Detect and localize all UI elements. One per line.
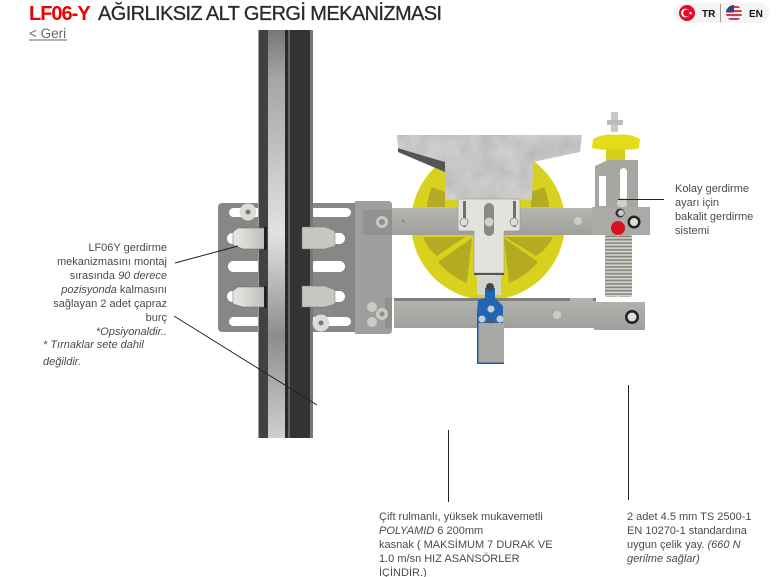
callout: tensioning system [675,183,753,237]
title: LF06-Y [29,3,91,25]
language label TR: TR [702,9,716,20]
lower cross bar [394,298,596,328]
callout: spring: 2 adet 4.5 mm TS 2500-1 [627,511,752,523]
callout: clips: değildir. [43,356,81,368]
upright bracket [595,160,638,208]
callout: clips: sağlayan 2 adet çapraz [53,298,167,310]
callout: spring: EN 10270-1 standardına [627,525,748,537]
callout: clips: pozisyonda kalmasını [60,284,167,296]
callout: spring [627,511,752,565]
callout: tensioning system: Kolay gerdirme [675,183,749,195]
callout: tensioning system: ayarı için [675,197,719,209]
spring [605,235,632,297]
callout: clips: mekanizmasını montaj [57,256,167,268]
guide rail [258,30,313,438]
callout: tensioning system: sistemi [675,225,709,237]
language label EN: EN [749,9,763,20]
rail clips [233,227,335,308]
callout: pulley: POLYAMID 6 200mm [379,525,483,537]
title: AĞIRLIKSIZ ALT GERGİ MEKANİZMASI [98,2,441,25]
illustration: tension mechanism [218,30,650,438]
adjustment bolt and yellow knob [592,112,640,161]
callout: pulley: kasnak ( MAKSİMUM 7 DURAK VE [379,538,553,551]
mounting plate [218,203,358,332]
callout: tensioning system: bakalit gerdirme [675,211,753,223]
yellow pulley [411,146,565,300]
callout: spring: gerilme sağlar) [627,553,700,565]
icon: red button [611,221,625,235]
silver T bracket [458,199,520,295]
callout: clips: * Tırnaklar sete dahil [43,339,144,351]
callout: pulley: Çift rulmanlı, yüksek mukavemetli [379,511,543,523]
blue tensioner bracket with foot [477,283,504,364]
back link: < Geri [29,26,66,41]
callout: clips: sırasında 90 derece [70,270,167,282]
language switcher [673,3,769,23]
upper bar end [574,207,650,235]
callout: spring: uygun çelik yay. (660 N [627,539,741,551]
lower bar end [570,298,645,330]
callout: pulley [379,511,553,577]
upper cross bar [392,208,592,235]
icon: US flag [726,5,742,21]
callout: clips [43,242,167,368]
plate washers [240,204,330,332]
icon: Turkish flag [679,5,695,21]
callout: clips: burç [146,312,167,324]
callout: clips: LF06Y gerdirme [88,242,167,254]
galvanized top plate [397,135,582,200]
callout: pulley: 1.0 m/sn HIZ ASANSÖRLER [379,553,520,565]
leader lines [174,200,664,502]
bolt plate on mounting bracket [355,201,392,334]
callout: clips: *Opsiyonaldir.. [96,326,167,338]
